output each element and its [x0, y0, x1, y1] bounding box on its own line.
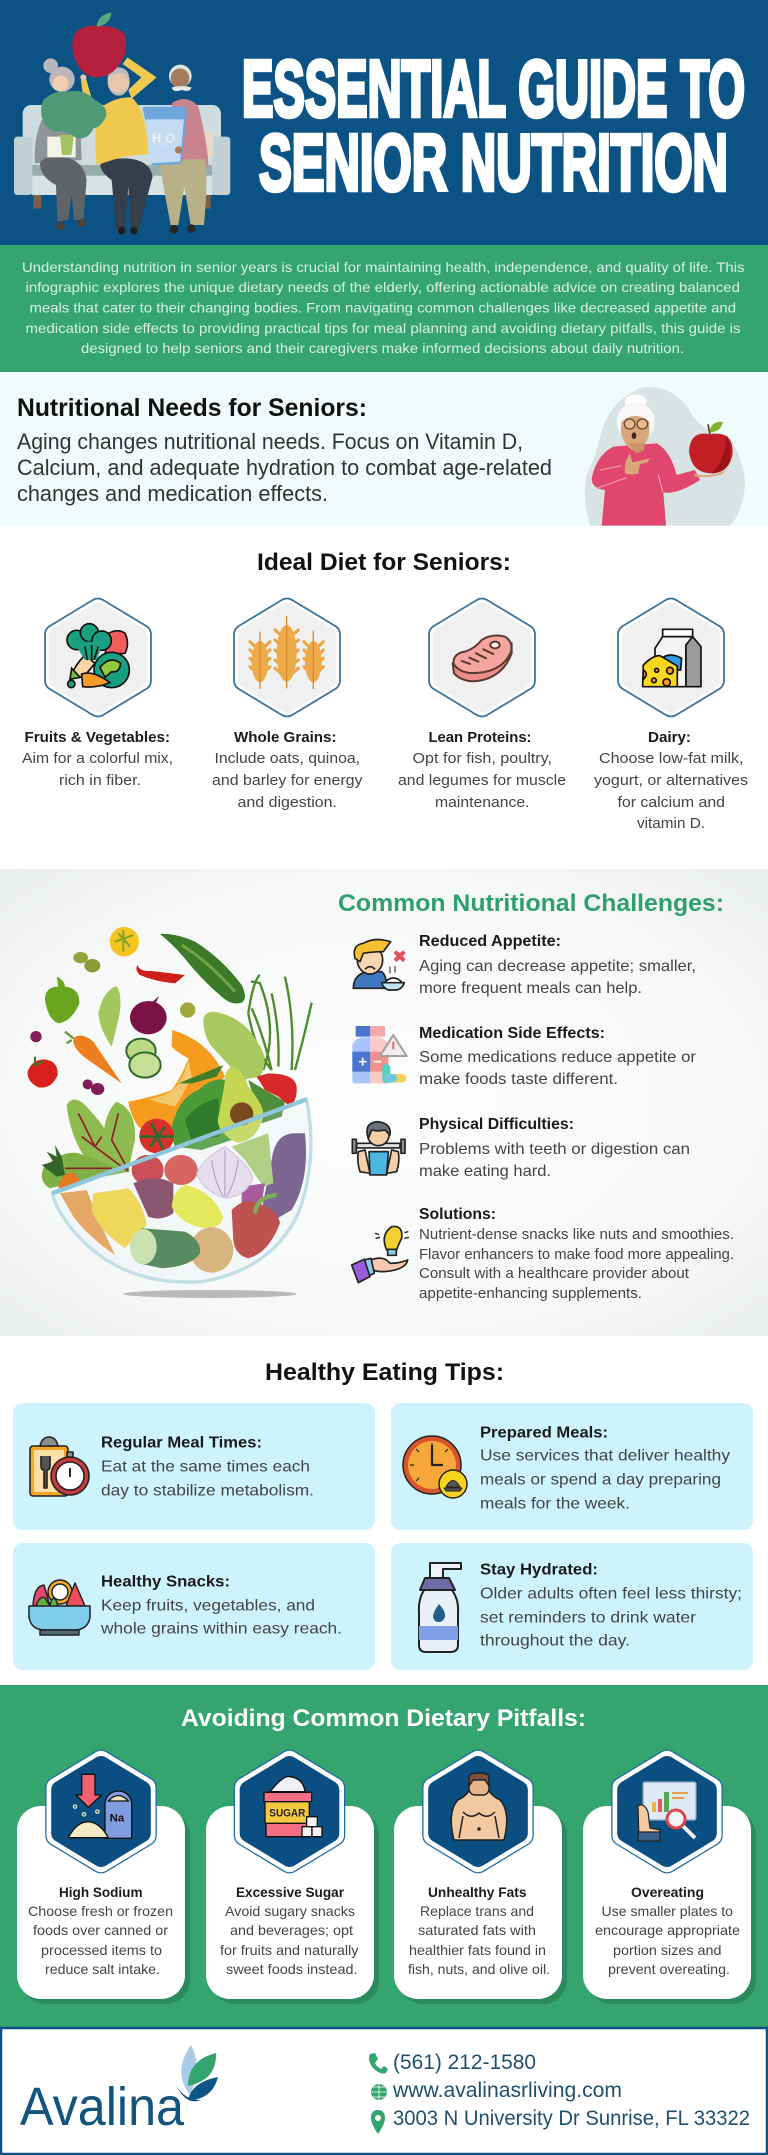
text: excessive sugar: Excessive Sugar [236, 1884, 345, 1900]
illustration: senior woman holding an apple [585, 387, 745, 526]
label: dairy: vitamin D. [637, 815, 705, 832]
text: high sodium [28, 1884, 173, 1977]
text: unhealthy fats: fish, nuts, and olive oil. [408, 1961, 550, 1977]
intro paragraph: medication side effects to providing practical tips for meal planning and avoiding dietary pitfalls, this guide is [26, 320, 740, 336]
card: prepared meals [391, 1403, 753, 1530]
icon: dairy hexagon [618, 598, 724, 716]
label: dairy: Dairy: [648, 729, 691, 746]
icon: medication [352, 1026, 407, 1083]
text: high sodium: High Sodium [59, 1884, 142, 1900]
text: stay hydrated: Older adults often feel less thirsty; [480, 1586, 742, 1602]
heading: nutritional needs: Nutritional Needs for Seniors: [17, 394, 367, 422]
text: stay hydrated [480, 1562, 742, 1650]
text: excessive sugar: sweet foods instead. [226, 1961, 358, 1977]
icon: sugar hexagon [234, 1750, 345, 1873]
text: medication side effects [419, 1025, 697, 1088]
text: reduced appetite: Aging can decrease appetite; smaller, [419, 958, 696, 975]
label: whole grains: Whole Grains: [234, 729, 336, 746]
label: whole grains: Include oats, quinoa, [214, 750, 360, 767]
illustration: three seniors on a sofa: O [165, 132, 175, 146]
text: prepared meals: meals for the week. [480, 1496, 630, 1512]
text: stay hydrated: set reminders to drink water [480, 1610, 697, 1626]
text: unhealthy fats: saturated fats with [418, 1922, 536, 1938]
label: lean proteins: maintenance. [435, 794, 530, 811]
icon: hand with light bulb [352, 1226, 409, 1283]
icon: body hexagon [423, 1750, 533, 1873]
text: solutions: Consult with a healthcare provider about [419, 1266, 689, 1282]
pitfall card: high sodium [17, 1750, 190, 2004]
text: medication side effects: make foods taste different. [419, 1071, 618, 1088]
challenge: reduced appetite [353, 933, 696, 997]
challenge: physical difficulties [352, 1116, 690, 1180]
text: medication side effects: Some medications reduce appetite or [419, 1049, 697, 1066]
label: whole grains: and digestion. [238, 794, 337, 811]
intro paragraph: Understanding nutrition in senior years is crucial for maintaining health, independence, and quality of life. This [22, 259, 744, 275]
footer [1, 2028, 767, 2154]
text: overeating [595, 1884, 740, 1977]
text: reduced appetite: Reduced Appetite: [419, 933, 561, 950]
text: unhealthy fats: Unhealthy Fats [428, 1884, 527, 1900]
title [242, 44, 745, 207]
text: solutions: Flavor enhancers to make food more appealing. [419, 1247, 734, 1263]
text: overeating: encourage appropriate [595, 1922, 740, 1938]
icon: sodium hexagon: Na [110, 1813, 125, 1825]
icon: person lifting barbell [352, 1122, 405, 1175]
text: solutions: Solutions: [419, 1206, 496, 1223]
text: reduced appetite: more frequent meals can help. [419, 980, 642, 997]
text: high sodium: processed items to [41, 1942, 162, 1958]
icon: chart and magnifier hexagon [612, 1750, 722, 1873]
text: unhealthy fats [408, 1884, 550, 1977]
illustration: vegetables falling into a glass bowl [28, 927, 312, 1298]
panel: avoiding common dietary pitfalls [0, 1685, 768, 2027]
item: whole grains [212, 598, 363, 811]
panel: nutritional needs [0, 372, 768, 526]
text: medication side effects: Medication Side Effects: [419, 1025, 605, 1042]
text: prepared meals: Prepared Meals: [480, 1424, 608, 1442]
icon: water bottle [419, 1563, 461, 1652]
label: dairy [594, 729, 748, 832]
text: healthy snacks: Keep fruits, vegetables, and [101, 1598, 315, 1614]
text: high sodium: foods over canned or [33, 1922, 168, 1938]
intro paragraph [22, 259, 744, 356]
nutritional needs text: Aging changes nutritional needs. Focus on Vitamin D, [17, 429, 523, 454]
icon: wheat hexagon [234, 598, 340, 716]
contact: address: 3003 N University Dr Sunrise, FL 33322 [393, 2107, 750, 2130]
card: healthy snacks [13, 1543, 375, 1670]
label: fruits and vegetables: Aim for a colorful mix, [22, 750, 173, 767]
header banner [0, 0, 768, 245]
nutritional needs text [17, 429, 552, 506]
text: excessive sugar: Avoid sugary snacks [225, 1903, 355, 1919]
text: unhealthy fats: Replace trans and [420, 1903, 534, 1919]
pitfall card: excessive sugar [206, 1750, 379, 2004]
label: dairy: for calcium and [618, 794, 725, 811]
heading: healthy eating tips: Healthy Eating Tips: [265, 1359, 504, 1386]
text: physical difficulties: make eating hard. [419, 1163, 551, 1180]
text: solutions: Nutrient-dense snacks like nuts and smoothies. [419, 1227, 734, 1243]
text: high sodium: reduce salt intake. [45, 1961, 160, 1977]
text: physical difficulties: Problems with teeth or digestion can [419, 1141, 690, 1158]
text: excessive sugar: and beverages; opt [230, 1922, 353, 1938]
text: excessive sugar [220, 1884, 358, 1977]
panel: common nutritional challenges [0, 869, 768, 1336]
heading: challenges: Common Nutritional Challenges: [338, 890, 724, 917]
card: regular meal times [13, 1403, 375, 1530]
illustration: three seniors on a sofa: H [152, 132, 161, 146]
logo: Avalina [20, 2045, 218, 2137]
text: physical difficulties [419, 1116, 690, 1180]
contact: phone: (561) 212-1580 [393, 2051, 536, 2074]
text: stay hydrated: throughout the day. [480, 1632, 630, 1650]
text: high sodium: Choose fresh or frozen [28, 1903, 173, 1919]
nutritional needs text: Calcium, and adequate hydration to combat age-related [17, 455, 552, 480]
label: lean proteins: Opt for fish, poultry, [412, 750, 552, 767]
text: regular meal times: Regular Meal Times: [101, 1434, 262, 1452]
item: lean proteins [398, 598, 566, 811]
text: prepared meals: meals or spend a day preparing [480, 1472, 721, 1488]
intro paragraph: meals that cater to their changing bodies. From navigating common challenges like decreased appetite and [30, 300, 736, 316]
text: solutions [419, 1206, 734, 1302]
heading: pitfalls: Avoiding Common Dietary Pitfalls: [181, 1705, 586, 1732]
label: lean proteins: and legumes for muscle [398, 772, 566, 789]
icon: vegetables hexagon [45, 598, 151, 716]
illustration: three seniors on a sofa [14, 12, 230, 235]
text: overeating: portion sizes and [613, 1942, 722, 1958]
text: prepared meals: Use services that deliver healthy [480, 1448, 730, 1464]
icon: steak hexagon [429, 598, 535, 716]
glass bowl [52, 1099, 311, 1282]
challenge: solutions [352, 1206, 734, 1302]
icon: clipboard and stopwatch [30, 1437, 89, 1496]
text: overeating: prevent overeating. [608, 1961, 730, 1977]
text: healthy snacks [100, 1574, 342, 1638]
text: prepared meals [480, 1424, 730, 1512]
item: dairy [594, 598, 748, 832]
text: solutions: appetite-enhancing supplements. [419, 1286, 642, 1302]
label: lean proteins [398, 729, 566, 811]
text: reduced appetite [419, 933, 696, 997]
text: overeating: Overeating [631, 1884, 704, 1900]
label: whole grains [212, 729, 363, 811]
text: regular meal times: Eat at the same times each [101, 1458, 310, 1476]
label: dairy: Choose low-fat milk, [599, 750, 744, 767]
intro band [0, 245, 768, 372]
text: stay hydrated: Stay Hydrated: [480, 1562, 598, 1578]
text: regular meal times: day to stabilize metabolism. [101, 1482, 314, 1500]
icon: sodium hexagon [46, 1750, 156, 1873]
label: fruits and vegetables: rich in fiber. [59, 772, 141, 789]
heading: ideal diet: Ideal Diet for Seniors: [257, 549, 511, 576]
text: physical difficulties: Physical Difficulties: [419, 1116, 574, 1133]
pitfall card: overeating [583, 1750, 756, 2004]
icon: clock with meal [403, 1436, 467, 1498]
label: dairy: yogurt, or alternatives [594, 772, 748, 789]
intro paragraph: designed to help seniors and their caregivers make informed decisions about daily nutrition. [81, 340, 684, 356]
text: overeating: Use smaller plates to [602, 1903, 733, 1919]
challenge: medication side effects [352, 1025, 697, 1088]
nutritional needs text: changes and medication effects. [17, 481, 328, 506]
label: whole grains: and barley for energy [212, 772, 363, 789]
logo: Avalina: Avalina [20, 2077, 185, 2137]
icon: reduced appetite [353, 940, 404, 990]
item: fruits and vegetables [22, 598, 173, 789]
illustration: three seniors on a sofa: 2 [162, 141, 165, 147]
icon: salad bowl [29, 1580, 90, 1635]
intro paragraph: infographic explores the unique dietary needs of the elderly, offering actionable advice on creating balanced [26, 279, 740, 295]
card: stay hydrated [391, 1543, 753, 1670]
text: excessive sugar: for fruits and naturally [220, 1942, 358, 1958]
text: regular meal times [101, 1434, 314, 1500]
bowl contents [60, 1133, 306, 1273]
contact: website: www.avalinasrliving.com [392, 2079, 622, 2102]
text: healthy snacks: whole grains within easy reach. [100, 1620, 342, 1638]
pitfall card: unhealthy fats [394, 1750, 567, 2004]
icon: sugar hexagon: SUGAR [269, 1807, 306, 1819]
text: unhealthy fats: healthier fats found in [409, 1942, 546, 1958]
text: healthy snacks: Healthy Snacks: [101, 1574, 230, 1590]
label: fruits and vegetables: Fruits & Vegetables: [24, 729, 170, 746]
falling ingredients [28, 927, 245, 1095]
label: lean proteins: Lean Proteins: [428, 729, 532, 746]
label: fruits and vegetables [22, 729, 173, 789]
